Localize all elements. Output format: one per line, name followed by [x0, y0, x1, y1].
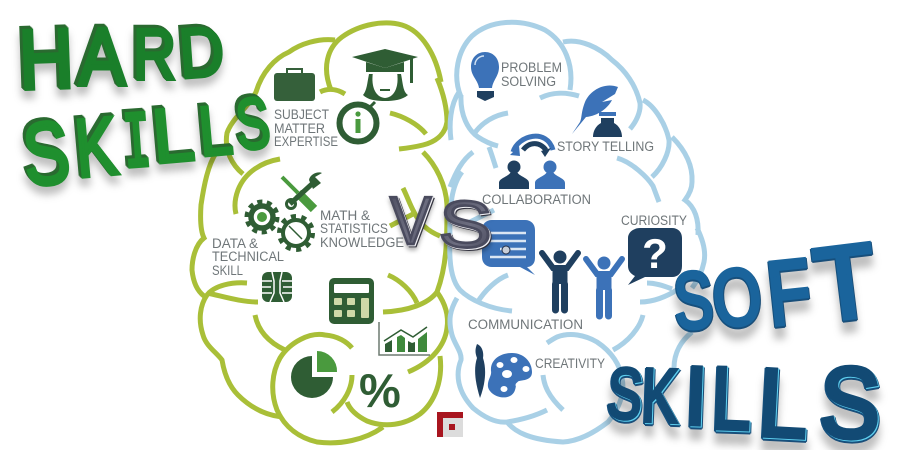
icon: calculator: [329, 278, 374, 324]
label: subject matter expertise: MATTER: [274, 121, 325, 136]
label: collaboration: COLLABORATION: [482, 192, 591, 207]
title: hard skills: [17, 11, 274, 205]
label: math and statistics knowledge: MATH &: [320, 208, 370, 223]
title: soft skills: T: [809, 222, 882, 343]
title: soft skills: [605, 222, 882, 450]
icon: speech bubble: [482, 220, 535, 275]
icon: chip: [262, 272, 292, 302]
title: hard skills: I: [120, 99, 154, 191]
icon: pie chart: [291, 351, 337, 398]
label: math and statistics knowledge: STATISTICS: [320, 221, 388, 236]
left brain outline: [192, 23, 448, 443]
label: subject matter expertise: EXPERTISE: [274, 134, 338, 149]
logo mark: [437, 412, 463, 437]
label: creativity: CREATIVITY: [535, 356, 605, 371]
label: curiosity: CURIOSITY: [621, 213, 687, 228]
icon: graduate: [352, 49, 418, 101]
label: subject matter expertise: SUBJECT: [274, 107, 329, 122]
label: problem solving: SOLVING: [501, 74, 556, 89]
title: hard skills: R: [133, 15, 176, 95]
label: data and technical skill: TECHNICAL: [212, 249, 284, 264]
title: soft skills: F: [763, 241, 816, 345]
title: soft skills: O: [709, 251, 766, 345]
title: soft skills: S: [671, 254, 716, 346]
title: hard skills: S: [19, 102, 74, 205]
icon: wrench and screwdriver: [282, 172, 322, 209]
label: data and technical skill: [212, 236, 284, 278]
icon: line and bar chart: [379, 322, 430, 355]
title: versus: S: [437, 187, 493, 262]
title: soft skills: L: [710, 348, 753, 448]
title: hard skills: K: [72, 100, 121, 195]
label: data and technical skill: SKILL: [212, 263, 243, 278]
title: hard skills: L: [195, 90, 236, 171]
icon: briefcase: [274, 69, 315, 101]
icon: percent sign: %: [359, 364, 401, 417]
label: story telling: STORY TELLING: [557, 139, 654, 154]
title: versus: [390, 182, 493, 262]
icon: palette: [488, 353, 532, 397]
label: communication: COMMUNICATION: [468, 317, 583, 332]
title: soft skills: S: [605, 353, 645, 435]
title: hard skills: A: [79, 12, 126, 103]
title: hard skills: H: [17, 11, 75, 107]
label: problem solving: [501, 60, 562, 89]
title: soft skills: I: [683, 350, 709, 443]
title: soft skills: K: [640, 352, 679, 438]
icon: cheering people: [542, 250, 622, 316]
title: hard skills: L: [149, 91, 197, 179]
icon: gears: [247, 202, 312, 250]
icon: collaboration arrows: [510, 136, 553, 157]
title: hard skills: S: [232, 83, 274, 166]
icon: light bulb: [471, 52, 499, 101]
right brain outline: [450, 22, 705, 442]
icon: quill and ink bottle: [572, 85, 622, 137]
icon: question bubble: [628, 228, 682, 285]
label: subject matter expertise: [274, 107, 338, 149]
label: problem solving: PROBLEM: [501, 60, 562, 75]
label: math and statistics knowledge: [320, 208, 404, 250]
label: math and statistics knowledge: KNOWLEDGE: [320, 235, 404, 250]
icon: info circle: [340, 102, 376, 142]
icon: paint brush: [475, 344, 485, 398]
icon: question bubble: ?: [642, 230, 668, 277]
label: data and technical skill: DATA &: [212, 236, 258, 251]
icon: two people: [499, 160, 565, 189]
title: hard skills: D: [177, 13, 227, 94]
title: versus: V: [390, 182, 432, 259]
